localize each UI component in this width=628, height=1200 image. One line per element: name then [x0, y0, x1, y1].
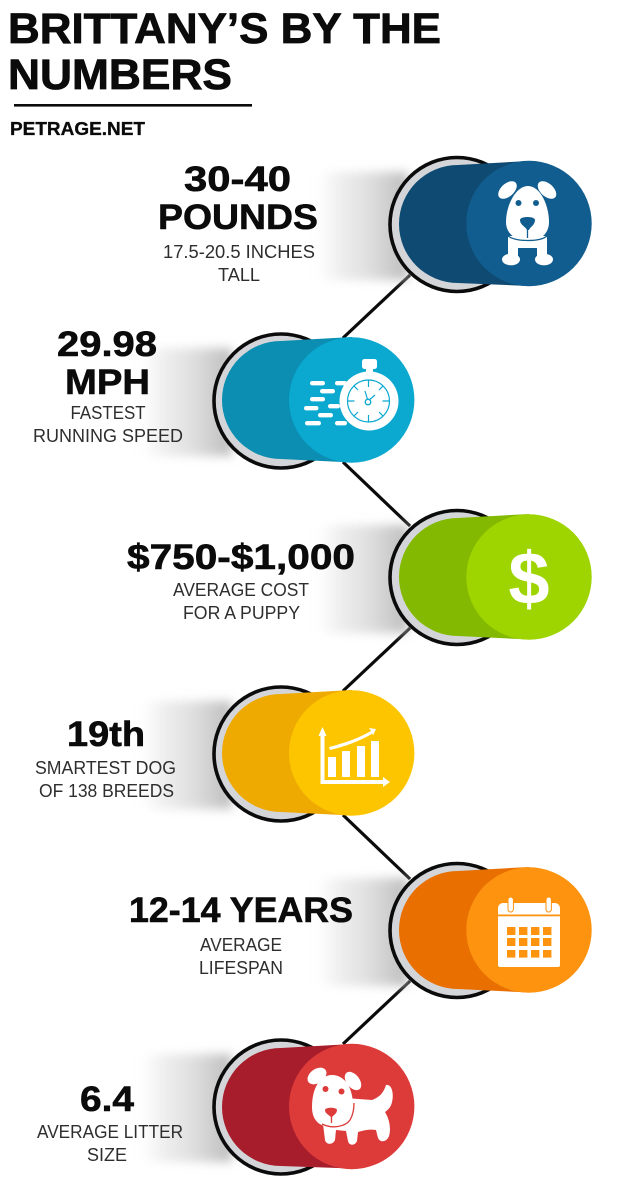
value: speed: 29.98 [57, 325, 157, 364]
shadow: litter [142, 1054, 232, 1162]
title: NUMBERS [8, 51, 232, 99]
caption: litter: SIZE [87, 1145, 127, 1165]
caption: litter [37, 1122, 183, 1165]
icon: calendar [498, 897, 560, 967]
ring: lifespan [390, 864, 524, 998]
caption: cost: FOR A PUPPY [183, 603, 300, 623]
pill: intelligence [222, 690, 352, 816]
value: cost: $750-$1,000 [127, 538, 355, 577]
icon: dollar sign: $ [508, 537, 550, 620]
caption: litter: AVERAGE LITTER [37, 1122, 183, 1142]
ring: intelligence [214, 687, 348, 821]
caption: cost [173, 580, 309, 623]
ring: cost [390, 510, 524, 644]
panel: intelligence [35, 687, 414, 821]
source label: PETRAGE.NET [10, 119, 145, 139]
icon: stopwatch [304, 359, 398, 430]
circle: cost [466, 514, 592, 640]
ring: weight [390, 158, 524, 292]
title [8, 5, 441, 99]
value: intelligence: 19th [67, 715, 145, 754]
pill: litter [222, 1044, 352, 1168]
caption: speed: FASTEST [70, 403, 146, 423]
value: lifespan: 12-14 YEARS [129, 891, 353, 930]
shadow: intelligence [142, 701, 232, 809]
panel: lifespan [129, 864, 592, 998]
caption: lifespan: LIFESPAN [199, 958, 283, 978]
caption: intelligence: SMARTEST DOG [35, 758, 176, 778]
shadow: lifespan [318, 878, 408, 986]
icon: growth chart [318, 727, 390, 787]
value: speed [57, 325, 157, 402]
pill: cost [399, 514, 529, 640]
caption: weight: TALL [218, 265, 260, 285]
panel: weight [158, 158, 592, 292]
ring: litter [214, 1040, 348, 1174]
icon: dog face [495, 178, 560, 265]
ring: speed [214, 334, 348, 468]
panel: cost [127, 510, 592, 644]
caption: weight [163, 242, 315, 285]
title underline [14, 104, 252, 107]
value: speed: MPH [65, 363, 150, 402]
shadow: speed [142, 348, 232, 456]
title: BRITTANY’S BY THE [8, 5, 441, 53]
panel: speed [33, 325, 414, 468]
caption: speed [33, 403, 183, 446]
caption: intelligence: OF 138 BREEDS [39, 781, 174, 801]
caption: intelligence [35, 758, 176, 801]
circle: lifespan [466, 867, 592, 993]
caption: cost: AVERAGE COST [173, 580, 309, 600]
caption: lifespan: AVERAGE [200, 935, 282, 955]
pill: speed [222, 337, 352, 462]
value: weight: 30-40 [184, 160, 291, 199]
shadow: weight [318, 172, 408, 280]
value: litter: 6.4 [80, 1080, 135, 1119]
circle: intelligence [289, 690, 414, 816]
circle: speed [289, 337, 414, 463]
value: weight: POUNDS [158, 198, 318, 237]
pill: lifespan [399, 867, 529, 992]
panel: litter [37, 1040, 414, 1174]
caption: speed: RUNNING SPEED [33, 426, 183, 446]
circle: litter [289, 1044, 414, 1169]
pill: weight [399, 161, 529, 286]
connector lines [343, 275, 410, 1044]
icon: dog side view [304, 1064, 393, 1145]
shadow: cost [318, 525, 408, 633]
circle: weight [466, 161, 592, 286]
caption: weight: 17.5-20.5 INCHES [163, 242, 315, 262]
caption: lifespan [199, 935, 283, 978]
value: weight [158, 160, 318, 237]
